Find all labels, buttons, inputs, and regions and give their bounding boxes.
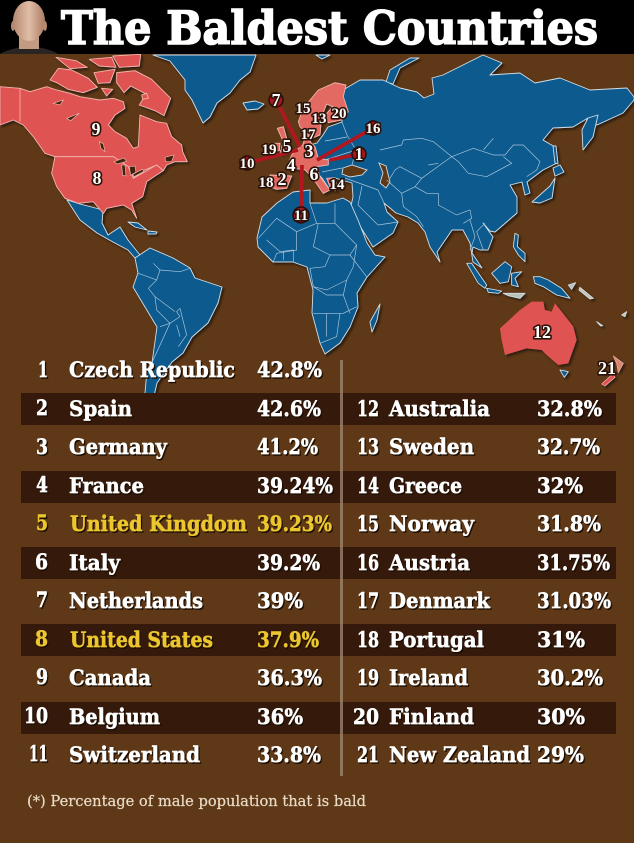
row 6: 39.2% [257,550,320,575]
row 17: 17 [357,588,379,613]
row 9: Canada [69,665,151,690]
map number labels: 6 [310,164,318,184]
row 9 [36,664,322,690]
row 8: United States [70,627,213,652]
row 8: 37.9% [257,627,319,652]
map number labels: 2 [278,169,286,189]
map: Iceland [243,101,264,110]
row 11: 11 [29,741,48,766]
map: Novaya Zemlya [386,58,419,84]
row 18: 18 [357,627,379,652]
row 14: Greece [389,473,462,498]
map number labels: 17 [300,127,316,143]
map number labels: 9 [92,119,100,139]
row 21 [357,742,584,767]
row 7: Netherlands [69,588,203,613]
title band [0,0,634,54]
row 2: 2 [36,395,48,420]
row 14: 14 [357,473,379,498]
map: Africa borders [258,203,367,343]
row 15: Norway [389,511,475,536]
pointer: 1 [330,154,359,160]
row 15 [357,511,601,536]
row 8 [35,626,319,652]
map number labels: 1 [354,144,364,164]
row 20: 20 [353,704,379,729]
map: Great Lakes [114,158,144,177]
map: Africa [257,190,385,354]
row 16: Austria [388,550,470,575]
map: New Zealand [602,356,623,386]
pin: 16 [366,121,380,135]
row 15: 15 [357,511,379,536]
pointer: 10 [247,150,298,163]
row 17: 31.03% [537,588,611,613]
pin: 1 [352,147,366,161]
row 19: 30.2% [537,665,603,690]
row 2: Spain [69,396,132,421]
map: Black Sea and Caspian Sea [342,163,390,188]
map: Cuba and Hispaniola [128,222,157,234]
row 5: United Kingdom [70,511,247,536]
map number labels: 12 [533,322,551,342]
map: United Kingdom and Ireland [273,127,292,153]
row 19 [357,665,603,690]
row 14 [357,473,583,498]
row 12: Australia [388,396,490,421]
row 6: 6 [35,549,48,574]
map: Greenland [153,55,256,123]
map number labels: 18 [258,175,274,191]
map: South America [133,248,222,410]
row 21: New Zealand [389,742,530,767]
row 10 [24,703,303,729]
row 3: 3 [36,434,48,459]
footnote: (*) Percentage of male population that is bald [27,794,366,810]
map: Australia [500,302,577,365]
row 2: 42.6% [257,396,321,421]
map number labels: 14 [330,177,345,193]
row 11: Switzerland [69,742,200,767]
title: The Baldest Countries [61,1,598,55]
row 6: Italy [69,550,121,575]
row 20 [353,704,585,729]
row 10: 36% [257,704,303,729]
row bands [21,393,616,734]
pin: 7 [269,93,283,107]
map number labels: 16 [366,121,381,137]
map: Madagascar [370,304,380,332]
row 3: 41.2% [257,434,318,459]
row 10: Belgium [69,704,160,729]
map number labels: 15 [296,101,310,117]
row 7: 39% [257,588,303,613]
map pointer lines [240,93,380,223]
map: Alaska border and Canadian lakes [19,88,21,122]
row 9: 36.3% [257,665,322,690]
map: Iberia [269,175,292,189]
row 1: Czech Republic [69,357,235,382]
map: Southeast Asia islands [467,233,627,377]
row 5: 39.23% [257,511,332,536]
ranking table [24,357,611,767]
pin: 10 [240,156,254,170]
map number labels: 11 [294,208,308,224]
map: Kamchatka [582,115,598,150]
row 5 [36,510,332,536]
row 4: France [69,473,144,498]
map number labels: 19 [262,142,276,158]
map number labels: 8 [92,168,102,188]
row 2 [36,395,321,421]
row 1: 1 [38,357,48,382]
map: Greece [327,178,336,191]
map: Eastern Europe and Middle East borders [322,122,398,225]
row 8: 8 [35,626,48,651]
row 1 [38,357,322,382]
row 15: 31.8% [537,511,601,536]
row 4: 39.24% [257,473,333,498]
map: Scandinavia [298,83,348,138]
row 14: 32% [537,473,583,498]
row 7 [36,587,303,613]
column divider [340,360,343,776]
pin: 11 [293,207,309,223]
map number labels: 20 [332,106,346,122]
map number labels: 5 [282,136,292,156]
row 9: 9 [36,664,48,689]
map number labels: 3 [304,141,314,161]
row 7: 7 [36,587,48,612]
map: Mexico and Central America [67,200,140,258]
map: Eurasia [293,55,634,268]
map number labels: 4 [286,155,296,175]
map: Svalbard and Arctic islands [316,55,330,59]
pointer: 7 [276,100,300,147]
row 21: 29% [537,742,584,767]
row 4: 4 [36,472,48,497]
icon: bald head [0,1,58,54]
map number labels: 21 [598,358,616,378]
row 19: Ireland [389,665,468,690]
row 3 [36,434,318,459]
row 13: 13 [357,434,379,459]
map number labels: 13 [312,111,326,127]
row 21: 21 [357,742,379,767]
row 12 [357,396,602,421]
row 16: 31.75% [537,550,610,575]
row 12: 12 [357,396,379,421]
row 17 [357,588,611,613]
map number labels: 7 [272,90,280,110]
row 13: 32.7% [537,434,600,459]
map number labels [92,90,616,378]
row 3: Germany [69,434,168,459]
row 16: 16 [357,550,379,575]
row 11 [29,741,321,767]
map: Arctic islands [50,54,171,116]
row 18 [357,627,585,652]
row 10: 10 [24,703,48,728]
row 13: Sweden [389,434,474,459]
row 16 [357,550,610,575]
row 19: 19 [357,665,379,690]
pointer: 11 [301,165,302,215]
row 18: 31% [537,627,585,652]
world map [0,54,634,410]
map: South America borders [138,263,190,363]
map: Japan and Sakhalin [532,146,564,203]
row 11: 33.8% [257,742,321,767]
row 18: Portugal [389,627,484,652]
map number labels: 10 [240,156,254,172]
row 4 [36,472,333,498]
map: Western and Central Europe [288,135,330,193]
row 17: Denmark [389,588,490,613]
pointer: 16 [317,128,373,160]
map: Canada and Alaska [0,54,187,178]
row 20: Finland [389,704,474,729]
map: Asia borders [380,138,540,250]
row 12: 32.8% [537,396,602,421]
row 6 [35,549,320,575]
row 1: 42.8% [257,357,322,382]
row 5: 5 [36,510,48,535]
map: United States [52,157,163,218]
row 20: 30% [537,704,585,729]
row 13 [357,434,600,459]
